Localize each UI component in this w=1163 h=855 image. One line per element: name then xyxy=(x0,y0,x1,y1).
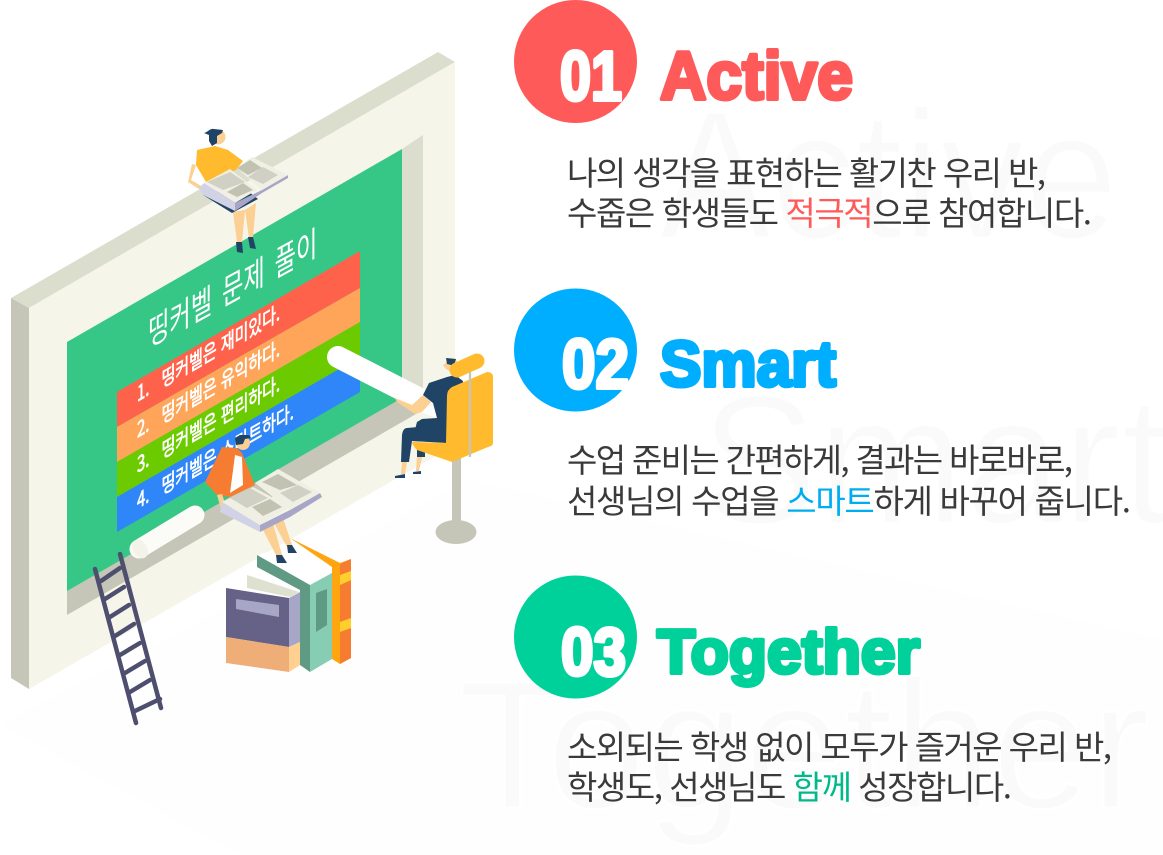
description 01: 수줍은 학생들도 적극적으로 참여합니다. xyxy=(567,187,1092,235)
description 01 xyxy=(567,147,1092,235)
big chalk xyxy=(338,357,437,418)
badge 01: 01 xyxy=(560,37,622,115)
chair seat and back xyxy=(412,361,493,462)
watermark words xyxy=(458,72,1163,847)
stripe text: 4. xyxy=(137,478,149,516)
section 01: Active xyxy=(514,0,1092,235)
description 02: 선생님의 수업을 스마트하게 바꾸어 줍니다. xyxy=(567,475,1131,523)
ladder xyxy=(95,554,161,723)
description 02 xyxy=(567,434,1131,523)
books stack xyxy=(226,538,351,672)
seated teacher xyxy=(395,358,463,478)
stripe text xyxy=(137,295,294,516)
blackboard frame xyxy=(11,52,455,689)
heading Active: Active xyxy=(660,38,853,114)
badge 02 xyxy=(514,288,637,412)
watermark words: Together xyxy=(458,642,1150,847)
illustration: isometric blackboard scene xyxy=(11,52,493,723)
description 02: 수업 준비는 간편하게, 결과는 바로바로, xyxy=(567,434,1073,482)
watermark words: Active xyxy=(659,72,1118,277)
stripe text: 3. xyxy=(137,442,149,480)
person reading on the books xyxy=(205,435,322,563)
badge 03: 03 xyxy=(561,614,626,690)
description 03: 학생도, 선생님도 함께 성장합니다. xyxy=(567,761,1012,809)
board title: 띵커벨 문제 풀이 xyxy=(148,214,317,357)
stripe text: 2. xyxy=(137,407,149,445)
stripe text: 띵커벨은 유익하다. xyxy=(162,331,280,430)
chair xyxy=(436,455,476,544)
description 03: 소외되는 학생 없이 모두가 즐거운 우리 반, xyxy=(567,721,1112,769)
section 02: Smart xyxy=(514,288,1131,523)
floor shadow xyxy=(0,480,1163,855)
badge 01 xyxy=(514,0,637,123)
badge 02: 02 xyxy=(562,325,629,403)
badge 03 xyxy=(514,576,637,698)
section 03: Together xyxy=(514,576,1112,809)
description 03 xyxy=(567,721,1112,809)
small chalk xyxy=(129,515,195,561)
person reading on top of the board xyxy=(188,129,288,253)
stripe text: 1. xyxy=(137,371,149,409)
stripe text: 띵커벨은 스마트하다. xyxy=(162,394,294,501)
green board xyxy=(67,149,402,591)
list stripes xyxy=(117,251,360,532)
stripe text: 띵커벨은 편리하다. xyxy=(162,366,280,465)
stripe text: 띵커벨은 재미있다. xyxy=(162,295,280,394)
description 01: 나의 생각을 표현하는 활기찬 우리 반, xyxy=(567,147,1046,195)
heading Smart: Smart xyxy=(660,328,836,400)
heading Together: Together xyxy=(657,618,920,687)
